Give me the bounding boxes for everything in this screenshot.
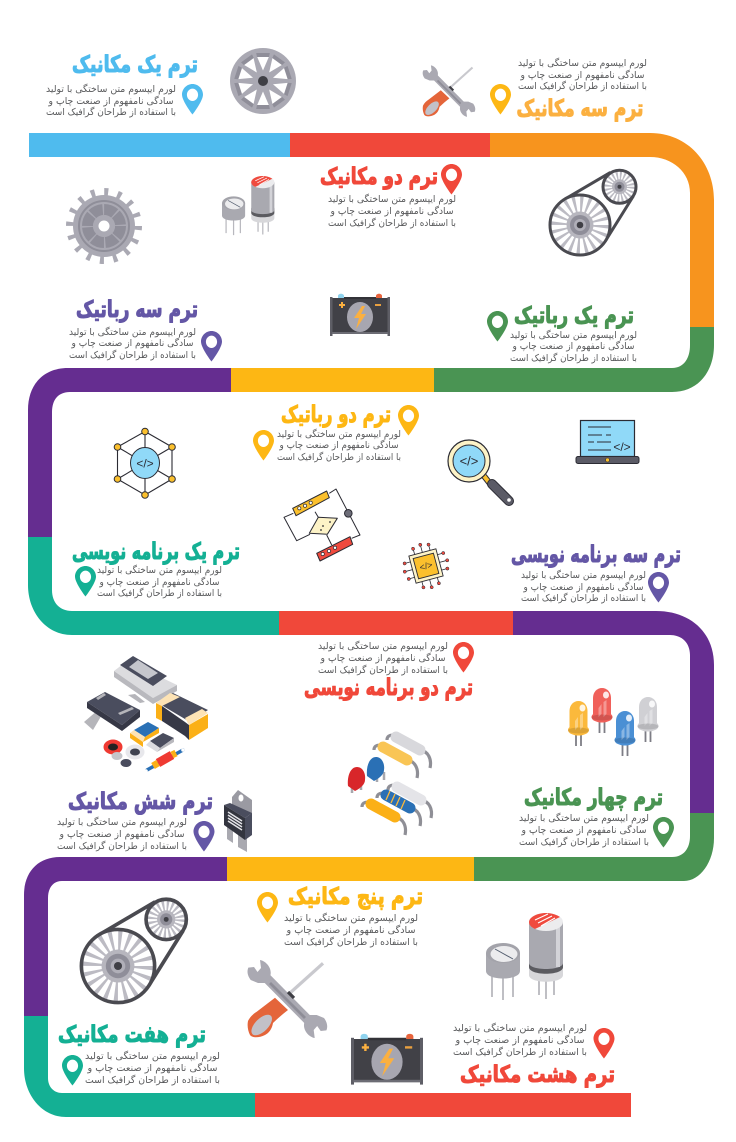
icon: transistor bbox=[224, 790, 252, 852]
panel: term 6 mechanics: سادگی نامفهوم از صنعت چاپ و bbox=[59, 828, 185, 840]
panel: term 3 robotics: لورم ایپسوم متن ساختگی با تولید bbox=[69, 326, 196, 338]
panel: term 2 mechanics: سادگی نامفهوم از صنعت چاپ و bbox=[330, 205, 454, 217]
panel: term 4 mechanics: با استفاده از طراحان گرافیک است bbox=[519, 836, 649, 848]
panel: term 3 programming: با استفاده از طراحان گرافیک است bbox=[521, 592, 646, 604]
panel: term 7 mechanics bbox=[58, 1022, 220, 1086]
panel: term 6 mechanics: ترم شش مکانیک bbox=[68, 789, 213, 815]
icon: magnifier code: </> bbox=[460, 454, 478, 468]
panel: term 7 mechanics: سادگی نامفهوم از صنعت چاپ و bbox=[86, 1062, 218, 1074]
icon: code network bbox=[114, 428, 175, 498]
icon: laptop code bbox=[576, 420, 639, 464]
panel: term 3 robotics: ترم سه رباتیک bbox=[76, 297, 198, 323]
panel: term 5 mechanics: لورم ایپسوم متن ساختگی با تولید bbox=[284, 912, 418, 924]
panel: term 1 programming: سادگی نامفهوم از صنعت چاپ و bbox=[99, 576, 220, 588]
icon: capacitors large bbox=[486, 913, 563, 1000]
panel: term 1 programming bbox=[72, 539, 240, 599]
panel: term 5 mechanics bbox=[257, 884, 423, 948]
panel: term 2 robotics: لورم ایپسوم متن ساختگی با تولید bbox=[277, 428, 401, 440]
icon: belt drive bbox=[550, 170, 636, 255]
icon: laptop code: </> bbox=[613, 440, 631, 454]
icon: wrench and screwdriver large bbox=[248, 960, 327, 1039]
panel: term 1 robotics: ترم یک رباتیک bbox=[514, 303, 634, 329]
panel: term 3 robotics: با استفاده از طراحان گرافیک است bbox=[69, 349, 196, 361]
panel: term 2 mechanics bbox=[320, 164, 462, 229]
panel: term 1 mechanics: سادگی نامفهوم از صنعت چاپ و bbox=[48, 95, 174, 107]
panel: term 2 programming bbox=[304, 640, 474, 701]
icon: wrench and screwdriver small bbox=[423, 65, 475, 117]
panel: term 6 mechanics: لورم ایپسوم متن ساختگی با تولید bbox=[57, 816, 187, 828]
panel: term 1 mechanics: با استفاده از طراحان گرافیک است bbox=[46, 106, 176, 118]
panel: term 3 mechanics: ترم سه مکانیک bbox=[516, 96, 644, 122]
icon: SMD components bbox=[84, 656, 208, 773]
panel: term 6 mechanics: با استفاده از طراحان گرافیک است bbox=[57, 840, 187, 852]
panel: term 1 robotics bbox=[487, 303, 637, 364]
panel: term 8 mechanics bbox=[453, 1022, 615, 1088]
panel: term 3 mechanics: با استفاده از طراحان گرافیک است bbox=[518, 80, 647, 92]
panel: term 4 mechanics bbox=[519, 785, 674, 848]
panel: term 3 mechanics bbox=[490, 57, 647, 122]
icon: battery bbox=[330, 294, 390, 336]
icon: capacitors small bbox=[222, 176, 274, 235]
panel: term 8 mechanics: ترم هشت مکانیک bbox=[460, 1062, 615, 1088]
panel: term 7 mechanics: ترم هفت مکانیک bbox=[58, 1022, 206, 1048]
panel: term 2 programming: سادگی نامفهوم از صنعت چاپ و bbox=[320, 652, 446, 664]
panel: term 3 programming: لورم ایپسوم متن ساختگی با تولید bbox=[521, 569, 646, 581]
panel: term 2 robotics: سادگی نامفهوم از صنعت چاپ و bbox=[279, 439, 399, 451]
icon: code chip bbox=[397, 537, 455, 595]
panel: term 2 mechanics: ترم دو مکانیک bbox=[320, 164, 438, 190]
icon: LEDs bbox=[568, 688, 658, 756]
panel: term 3 robotics bbox=[69, 297, 222, 362]
panel: term 1 mechanics: ترم یک مکانیک bbox=[72, 52, 198, 78]
panel: term 2 mechanics: با استفاده از طراحان گرافیک است bbox=[328, 217, 456, 229]
icon: gear bbox=[70, 192, 138, 260]
panel: term 5 mechanics: با استفاده از طراحان گرافیک است bbox=[284, 936, 418, 948]
panel: term 2 programming: ترم دو برنامه نویسی bbox=[304, 675, 473, 701]
panel: term 4 mechanics: سادگی نامفهوم از صنعت چاپ و bbox=[521, 824, 647, 836]
panel: term 5 mechanics: سادگی نامفهوم از صنعت چاپ و bbox=[285, 924, 416, 936]
panel: term 4 mechanics: ترم چهار مکانیک bbox=[524, 785, 663, 811]
panel: term 3 programming: سادگی نامفهوم از صنعت چاپ و bbox=[523, 581, 644, 593]
panel: term 1 mechanics bbox=[46, 52, 203, 118]
panel: term 4 mechanics: لورم ایپسوم متن ساختگی با تولید bbox=[519, 812, 649, 824]
panel: term 7 mechanics: با استفاده از طراحان گرافیک است bbox=[85, 1074, 220, 1086]
panel: term 1 robotics: لورم ایپسوم متن ساختگی با تولید bbox=[510, 329, 637, 341]
panel: term 2 robotics: با استفاده از طراحان گرافیک است bbox=[277, 451, 401, 463]
icon: belt drive large bbox=[81, 899, 186, 1003]
panel: term 8 mechanics: لورم ایپسوم متن ساختگی با تولید bbox=[453, 1022, 587, 1034]
panel: term 8 mechanics: سادگی نامفهوم از صنعت چاپ و bbox=[454, 1034, 585, 1046]
icon: code chip: </> bbox=[418, 559, 434, 573]
panel: term 8 mechanics: با استفاده از طراحان گرافیک است bbox=[453, 1046, 587, 1058]
panel: term 6 mechanics bbox=[57, 789, 214, 852]
panel: term 3 mechanics: سادگی نامفهوم از صنعت چاپ و bbox=[520, 69, 645, 81]
icon: code network: </> bbox=[136, 456, 154, 470]
panel: term 2 programming: با استفاده از طراحان گرافیک است bbox=[318, 664, 448, 676]
panel: term 3 mechanics: لورم ایپسوم متن ساختگی با تولید bbox=[518, 57, 647, 69]
icon: circuit diagram bbox=[284, 489, 360, 561]
icon: wheel bbox=[230, 48, 296, 114]
panel: term 2 programming: لورم ایپسوم متن ساختگی با تولید bbox=[318, 640, 448, 652]
panel: term 2 mechanics: لورم ایپسوم متن ساختگی با تولید bbox=[328, 193, 456, 205]
panel: term 3 programming bbox=[511, 542, 681, 604]
panel: term 2 robotics bbox=[253, 402, 419, 463]
panel: term 1 programming: لورم ایپسوم متن ساختگی با تولید bbox=[97, 564, 222, 576]
panel: term 5 mechanics: ترم پنج مکانیک bbox=[288, 884, 423, 910]
panel: term 1 robotics: با استفاده از طراحان گرافیک است bbox=[510, 352, 637, 364]
panel: term 1 programming: ترم یک برنامه نویسی bbox=[72, 539, 240, 565]
panel: term 2 robotics: ترم دو رباتیک bbox=[281, 402, 391, 428]
panel: term 7 mechanics: لورم ایپسوم متن ساختگی با تولید bbox=[85, 1050, 220, 1062]
panel: term 3 robotics: سادگی نامفهوم از صنعت چاپ و bbox=[71, 337, 194, 349]
panel: term 1 robotics: سادگی نامفهوم از صنعت چاپ و bbox=[512, 340, 635, 352]
panel: term 1 programming: با استفاده از طراحان گرافیک است bbox=[97, 587, 222, 599]
icon: resistors and capacitors bbox=[348, 735, 432, 835]
panel: term 1 mechanics: لورم ایپسوم متن ساختگی با تولید bbox=[46, 83, 176, 95]
icon: magnifier code bbox=[448, 440, 511, 502]
icon: battery large bbox=[351, 1034, 423, 1085]
